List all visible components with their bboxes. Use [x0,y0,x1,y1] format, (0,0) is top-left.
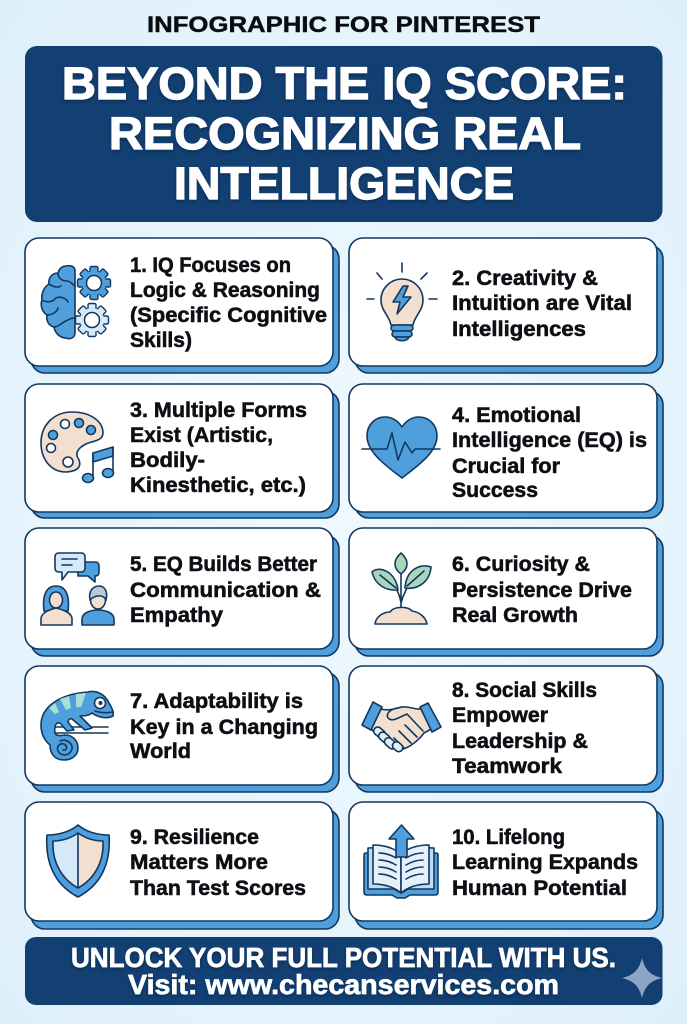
panel: card 3 multiple forms [25,384,339,518]
text: item 6: Real Growth [452,603,578,627]
text: item 8 [452,678,597,778]
text: item 3 [130,398,307,497]
footer text: UNLOCK YOUR FULL POTENTIAL WITH US. [71,942,616,973]
icon: palette and music note [41,412,114,482]
text: item 3: Bodily- [130,448,205,472]
icon: brain and gears [41,266,110,339]
text: item 9: Than Test Scores [130,876,306,900]
text: item 7: World [130,739,191,763]
text: item 5: 5. EQ Builds Better [130,552,318,576]
text: item 1 [130,253,327,352]
panel: card 9 resilience [25,802,339,929]
title text: BEYOND THE IQ SCORE: [62,58,627,109]
panel: card 6 curiosity [349,528,663,656]
text: item 10: Human Potential [452,876,627,900]
text: item 3: Kinesthetic, etc.) [130,473,306,497]
text: item 1: Skills) [130,328,192,352]
text: item 1: 1. IQ Focuses on [130,253,291,277]
icon: light bulb [367,263,437,341]
text: item 4: 4. Emotional [452,403,581,427]
panel: card 1 IQ [25,238,339,373]
text: item 8: 8. Social Skills [452,678,597,702]
text: item 1: (Specific Cognitive [130,303,327,327]
icon: open book with arrow [364,825,438,898]
text: item 3: 3. Multiple Forms [130,398,307,422]
text: item 9: 9. Resilience [130,825,259,849]
text: item 5: Communication & [130,578,321,602]
footer banner [25,937,662,1005]
title banner [25,46,662,222]
footer text [71,942,616,1000]
panel: card 4 emotional intelligence [349,384,663,518]
icon: two people with speech bubbles [41,553,114,625]
icon: heart with pulse [362,417,440,478]
panel: card 2 creativity [349,238,663,373]
text: item 7: Key in a Changing [130,715,318,739]
text: item 7 [130,689,318,763]
text: item 2 [452,266,632,341]
icon: chameleon [41,691,113,760]
footer text: Visit: www.checanservices.com [128,969,559,1000]
icon: handshake [362,702,441,753]
text: item 10 [452,825,638,900]
text: item 4: Success [452,478,538,502]
text: item 8: Teamwork [452,754,562,778]
text: item 6 [452,552,632,627]
icon: sprout [372,553,431,624]
panel: card 5 communication [25,528,339,656]
icon: sparkle star [622,958,662,998]
text: item 4: Intelligence (EQ) is [452,428,647,452]
text: item 10: Learning Expands [452,850,638,874]
text: item 4: Crucial for [452,454,561,478]
text: item 8: Empower [452,703,549,727]
text: item 6: Persistence Drive [452,578,632,602]
top label: INFOGRAPHIC FOR PINTEREST [147,12,541,37]
text: item 4 [452,403,647,502]
text: item 2: Intelligences [452,317,586,341]
text: item 2: Intuition are Vital [452,291,632,315]
text: item 8: Leadership & [452,729,588,753]
text: item 1: Logic & Reasoning [130,278,320,302]
text: item 7: 7. Adaptability is [130,689,303,713]
text: item 6: 6. Curiosity & [452,552,590,576]
text: item 10: 10. Lifelong [452,825,565,849]
text: item 3: Exist (Artistic, [130,423,273,447]
panel: card 7 adaptability [25,666,339,792]
title text [62,58,627,209]
panel: card 8 social skills [349,666,663,792]
icon: shield [47,825,109,897]
title text: INTELLIGENCE [174,158,514,209]
text: item 5 [130,552,321,627]
text: item 2: 2. Creativity & [452,266,598,290]
panel: card 10 lifelong learning [349,802,663,929]
text: item 9 [130,825,306,900]
text: item 5: Empathy [130,603,223,627]
title text: RECOGNIZING REAL [109,108,581,159]
text: item 9: Matters More [130,850,268,874]
